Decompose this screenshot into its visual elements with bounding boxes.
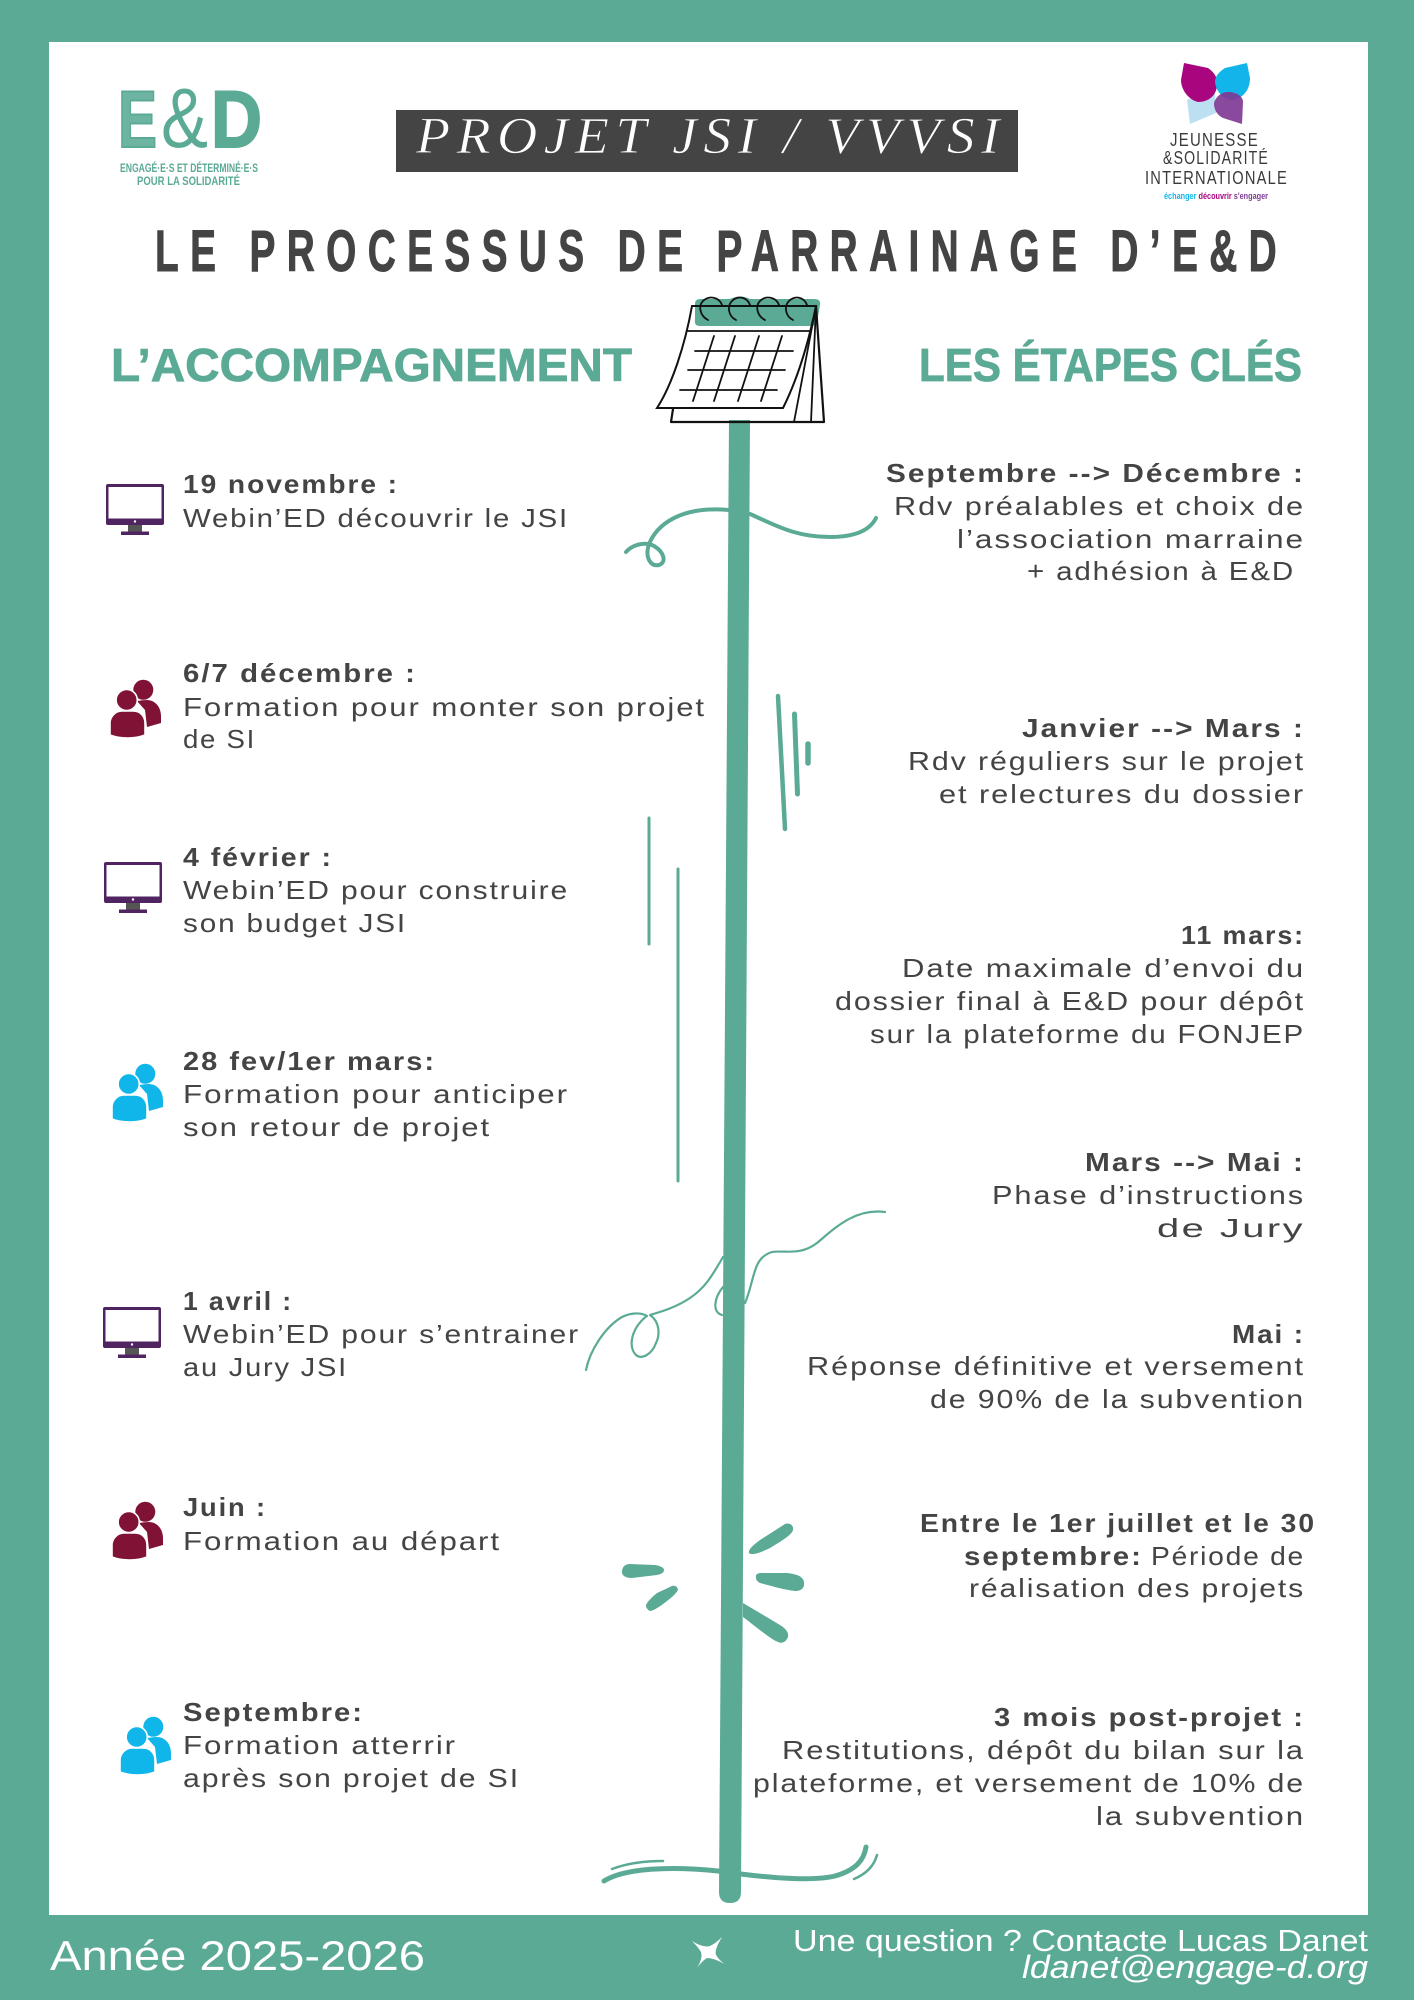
logo: E&D: E	[118, 75, 157, 165]
logo: E&D: ENGAGÉ·E·S ET DÉTERMINÉ·E·S	[120, 160, 258, 175]
step: 3 mois post-projet: 3 mois post-projet :	[994, 1702, 1305, 1732]
logo: Jeunesse et Solidarité Internationale: INTERNATIONALE	[1145, 168, 1288, 188]
step: septembre à décembre: l’association marraine	[957, 524, 1305, 554]
event: 4 février: 4 février :	[183, 842, 333, 872]
step: réalisation des projets	[920, 1508, 1316, 1603]
step: mai: de 90% de la subvention	[930, 1384, 1305, 1414]
step: mai	[807, 1319, 1305, 1414]
step: mai: Réponse définitive et versement	[807, 1351, 1305, 1381]
step: janvier à mars	[908, 713, 1305, 809]
footer: contact	[793, 1923, 1368, 1985]
event: 6/7 décembre: Formation pour monter son projet	[183, 692, 706, 722]
step: réalisation des projets: Période de	[1151, 1541, 1305, 1571]
icon: calendar	[657, 296, 824, 422]
event: 19 novembre: Webin’ED découvrir le JSI	[183, 503, 569, 533]
event: 28 fev/1er mars: Formation pour anticiper	[183, 1079, 569, 1109]
step: 3 mois post-projet: Restitutions, dépôt du bilan sur la	[782, 1735, 1305, 1765]
step: janvier à mars: Rdv réguliers sur le projet	[908, 746, 1305, 776]
event: 4 février: son budget JSI	[183, 908, 407, 938]
step: 11 mars: sur la plateforme du FONJEP	[870, 1019, 1305, 1049]
logo: E&D	[118, 71, 262, 188]
event: Juin	[112, 1492, 501, 1560]
event: 6/7 décembre	[110, 658, 706, 754]
event: Juin: Formation au départ	[183, 1526, 501, 1556]
logo: E&D: &	[161, 71, 208, 165]
decoration: top curl	[626, 509, 876, 565]
decoration: burst ticks	[622, 1523, 804, 1643]
decoration: short strokes	[649, 696, 808, 1181]
event: 19 novembre: 19 novembre :	[183, 469, 399, 499]
banner: Projet JSI / VVVSI: PROJET JSI / VVVSI	[415, 108, 1006, 165]
step: mars à mai: Phase d’instructions	[992, 1180, 1305, 1210]
step: réalisation des projets: Entre le 1er juillet et le 30	[920, 1508, 1316, 1538]
event: 28 fev/1er mars	[112, 1046, 569, 1142]
step: septembre à décembre: Septembre --> Décembre :	[886, 458, 1305, 488]
step: 3 mois post-projet: la subvention	[1096, 1801, 1305, 1831]
logo: Jeunesse et Solidarité Internationale	[1145, 63, 1288, 202]
event: 4 février	[104, 842, 569, 938]
step: septembre à décembre	[886, 458, 1305, 586]
event: 1 avril: 1 avril :	[183, 1286, 293, 1316]
step: mai: Mai :	[1232, 1319, 1305, 1349]
step: mars à mai: Mars --> Mai :	[1085, 1147, 1305, 1177]
logo: E&D: D	[211, 75, 262, 165]
logo: E&D: POUR LA SOLIDARITÉ	[137, 173, 240, 188]
timeline stem	[719, 420, 750, 1903]
decoration: middle curl	[586, 1211, 885, 1370]
step: 11 mars: Date maximale d’envoi du	[902, 953, 1305, 983]
step: mars à mai: de Jury	[1157, 1213, 1305, 1243]
event: Septembre	[120, 1697, 520, 1793]
event: 28 fev/1er mars: 28 fev/1er mars:	[183, 1046, 436, 1076]
event: 1 avril: Webin’ED pour s’entrainer	[183, 1319, 580, 1349]
footer: contact: ldanet@engage-d.org	[1022, 1949, 1368, 1985]
step: 11 mars: 11 mars:	[1181, 920, 1305, 950]
event: Septembre: Formation atterrir	[183, 1730, 457, 1760]
logo: Jeunesse et Solidarité Internationale: &SOLIDARITÉ	[1163, 148, 1269, 168]
step: mars à mai	[992, 1147, 1305, 1243]
event: Septembre: Septembre:	[183, 1697, 364, 1727]
step: janvier à mars: Janvier --> Mars :	[1022, 713, 1305, 743]
footer: contact: Une question ? Contacte Lucas Danet	[793, 1923, 1368, 1958]
event: 4 février: Webin’ED pour construire	[183, 875, 569, 905]
step: 11 mars: dossier final à E&D pour dépôt	[835, 986, 1305, 1016]
event: 1 avril	[103, 1286, 580, 1382]
event: 6/7 décembre: de SI	[183, 724, 256, 754]
icon: star	[692, 1937, 724, 1968]
heading: les étapes clés: LES ÉTAPES CLÉS	[919, 339, 1302, 391]
event: 1 avril: au Jury JSI	[183, 1352, 348, 1382]
step: septembre à décembre: + adhésion à E&D	[1027, 556, 1295, 586]
event: Juin: Juin :	[183, 1492, 267, 1522]
step: janvier à mars: et relectures du dossier	[939, 779, 1305, 809]
logo: Jeunesse et Solidarité Internationale: échanger découvrir s'engager	[1164, 191, 1268, 202]
event: 6/7 décembre: 6/7 décembre :	[183, 658, 417, 688]
event: 28 fev/1er mars: son retour de projet	[183, 1112, 491, 1142]
step: 3 mois post-projet: plateforme, et versement de 10% de	[753, 1768, 1305, 1798]
event: 19 novembre	[106, 469, 569, 535]
heading: l'accompagnement: L’ACCOMPAGNEMENT	[111, 339, 632, 391]
event: Septembre: après son projet de SI	[183, 1763, 520, 1793]
logo: Jeunesse et Solidarité Internationale: JEUNESSE	[1170, 130, 1259, 150]
step: réalisation des projets: septembre:	[964, 1541, 1143, 1571]
step: 3 mois post-projet	[753, 1702, 1305, 1831]
step: 11 mars	[835, 920, 1305, 1049]
decoration: bottom grass	[604, 1847, 877, 1881]
step: réalisation des projets: réalisation des projets	[969, 1573, 1305, 1603]
footer: année: Année 2025-2026	[50, 1932, 425, 1979]
step: septembre à décembre: Rdv préalables et choix de	[894, 491, 1305, 521]
